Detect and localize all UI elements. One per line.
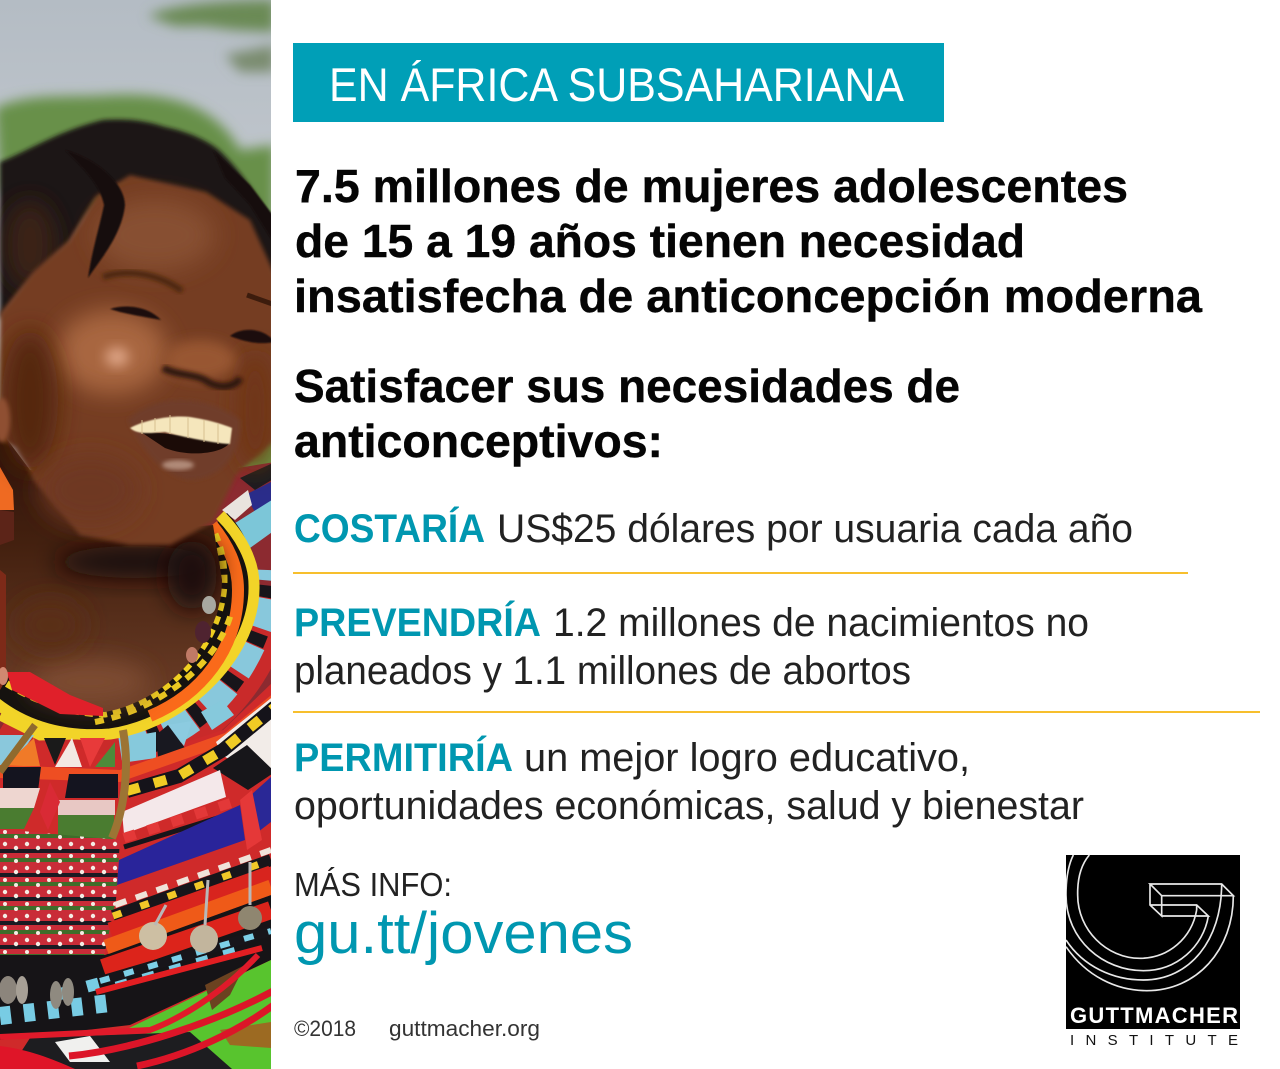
hair reddish tint on the left: [4, 200, 56, 290]
red and white stripes: [0, 788, 40, 808]
mouth: lips, teeth: [128, 400, 240, 480]
icon: spiral G with impossible box: [1066, 855, 1233, 991]
benefit: permitiría: un mejor logro educativo,: [524, 736, 970, 780]
black wedge separators: [146, 584, 271, 752]
face shading and highlights: [2, 199, 273, 525]
triangle row: [0, 735, 34, 766]
green stripes: [0, 808, 34, 829]
benefit: prevendría: 1.2 millones de nacimientos no: [553, 601, 1089, 645]
green fabric: [125, 960, 271, 1069]
main headline: insatisfecha de anticoncepción moderna: [294, 270, 1202, 322]
fabric motifs: [205, 965, 271, 1048]
turquoise wedges: [120, 570, 268, 748]
nose: [163, 340, 240, 386]
ear: [0, 398, 10, 442]
benefit: costaría: COSTARÍA: [294, 506, 485, 551]
benefit: prevendría: planeados y 1.1 millones de abortos: [294, 649, 911, 693]
collar: concentric bead bands: [0, 515, 272, 761]
right blue patch: [252, 777, 271, 830]
logo: Guttmacher Institute: GUTTMACHER: [1070, 1003, 1238, 1028]
brown metal pendants: [0, 725, 35, 772]
benefit: prevendría: [294, 600, 1089, 693]
red and white column: [240, 790, 262, 850]
footer: copyright and website: [294, 1016, 540, 1041]
subheading: [294, 360, 960, 467]
red row behind wedges: [0, 590, 272, 761]
subheading: Satisfacer sus necesidades de: [294, 360, 960, 412]
main headline: [294, 160, 1202, 322]
more info label: MÁS INFO:: [294, 866, 452, 903]
left beads and earring: [0, 467, 14, 690]
black beaded base: [0, 525, 238, 723]
front panel of the necklace: [0, 680, 275, 1069]
black row: [213, 745, 275, 790]
footer: copyright and website: guttmacher.org: [389, 1016, 540, 1041]
yellow front band redraw: [0, 716, 110, 736]
face: [0, 175, 275, 545]
braid strand on the forehead: [65, 150, 125, 278]
navy blocks: [3, 767, 41, 788]
bottom red strands: [0, 955, 258, 1037]
subheading: anticonceptivos:: [294, 415, 663, 467]
neck: [0, 430, 222, 712]
benefit: permitiría: [294, 735, 1084, 828]
black and white fabric: [10, 1032, 232, 1069]
warrior shield motif: [40, 782, 60, 830]
benefit: costaría: US$25 dólares por usuaria cada año: [497, 507, 1133, 551]
logo: Guttmacher Institute: [1066, 855, 1240, 1049]
benefit: permitiría: PERMITIRÍA: [294, 735, 513, 780]
benefit: permitiría: oportunidades económicas, salud y bienestar: [294, 784, 1084, 828]
footer: copyright and website: ©2018: [294, 1016, 356, 1041]
main headline: 7.5 millones de mujeres adolescentes: [295, 160, 1128, 212]
orange band: [150, 525, 238, 716]
red block row: [124, 800, 240, 838]
zigzag beaded apron: [0, 829, 120, 958]
photo background: sky and trees: [0, 0, 271, 731]
eyebrows and eyes: [103, 273, 278, 343]
red and orange strands: [0, 850, 275, 1069]
blue band: [117, 805, 245, 885]
right white beaded area: [216, 698, 271, 768]
earring beads: [186, 596, 216, 663]
more info link: gu.tt/jovenes: [294, 901, 633, 966]
banner: En África Subsahariana: EN ÁFRICA SUBSAHARIANA: [329, 58, 905, 111]
red garment: [7, 672, 103, 716]
dark base under the collar: [0, 462, 271, 731]
white band: [122, 770, 226, 834]
grass behind the shoulder: [240, 440, 271, 468]
braid on the right: [213, 150, 275, 245]
lower collar: dark band with turquoise beads: [0, 895, 271, 1040]
upper-right wedge beads of the collar: [222, 462, 275, 548]
logo: Guttmacher Institute: INSTITUTE: [1070, 1032, 1238, 1049]
silver coin pendants: [0, 862, 262, 1009]
neck shading: [15, 540, 217, 704]
hair: [0, 119, 275, 320]
yellow band: [0, 515, 254, 735]
benefit: prevendría: PREVENDRÍA: [294, 600, 541, 645]
main headline: de 15 a 19 años tienen necesidad: [295, 215, 1025, 267]
inner yellow beads: [0, 532, 224, 714]
orange stripe: [0, 692, 275, 782]
banner: En África Subsahariana: [293, 43, 944, 122]
photo: smiling young woman wearing beaded necklaces: [0, 0, 278, 1069]
yellow and black diagonal row: [127, 707, 275, 791]
